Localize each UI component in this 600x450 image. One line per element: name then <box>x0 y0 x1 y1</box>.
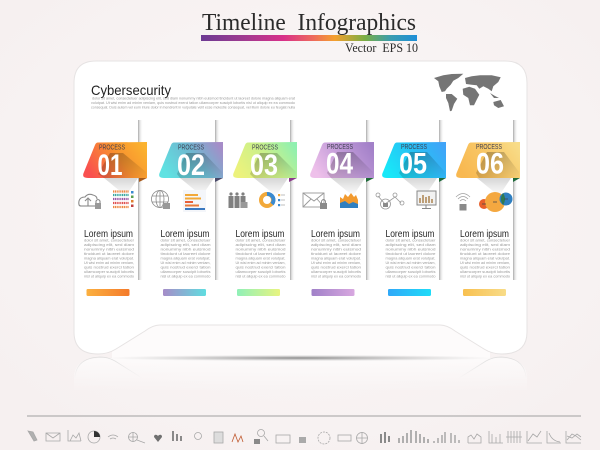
icon: venn circles <box>479 192 512 212</box>
heading: Cybersecurity: Cybersecurity <box>91 82 171 98</box>
color bar 5 <box>388 289 431 296</box>
color bar 6 <box>463 289 506 296</box>
icon: colored chart <box>232 434 243 442</box>
icon: falling bars <box>416 431 428 443</box>
text block 2: nonummy nibh euismod <box>160 248 211 252</box>
text block 2: magna aliquam erat volutpat. <box>160 256 211 260</box>
text block 2: ullamcorper suscipit lobortis <box>160 270 211 274</box>
text block 4: nisl ut aliquip ex ea commodo <box>311 274 361 278</box>
number 3: 03 <box>250 149 278 182</box>
icon: magnify bulb <box>194 432 202 440</box>
icon: wifi small <box>108 435 118 439</box>
text block 6: tincidunt ut laoreet dolore <box>460 252 510 256</box>
text block 3: nonummy nibh euismod <box>236 248 286 252</box>
text block 5: adipiscing elit, sed diam <box>386 243 436 247</box>
fold line 6 <box>513 120 518 280</box>
text block 4: ullamcorper suscipit lobortis <box>311 270 361 274</box>
icon: network lock <box>376 193 404 209</box>
subtitle: Vector EPS 10 <box>345 41 418 55</box>
icon: cloud lock small <box>338 435 351 441</box>
column 6 <box>456 120 520 296</box>
icon: small rising bars <box>434 432 445 443</box>
tab 6 <box>456 142 520 178</box>
text block 2: nisl ut aliquip ex ea commodo <box>160 274 211 278</box>
color bar 3 <box>237 289 280 296</box>
number 4: 04 <box>326 148 353 180</box>
icon: people rows chart <box>113 191 134 207</box>
icon: people lock <box>228 192 248 208</box>
notch fill <box>112 325 490 358</box>
icon: house bars <box>468 434 481 443</box>
icon: donut chart <box>261 194 285 206</box>
icon: curve chart <box>547 431 561 443</box>
intro text: volutpat. Ut wisi enim ad minim veniam, quis nostrud exerci tation ullamcorper suscipit lobortis nisl ut aliquip ex ea commodo <box>91 101 295 105</box>
text block 3: dolor sit amet, consectetuer <box>236 238 287 242</box>
column 3 <box>228 120 297 296</box>
intro text: consequat. Duis autem vel eum iriure dolor in hendrerit in vulputate velit esse molestie consequat, vel illum dolore eu feugiat nulla <box>91 106 295 110</box>
text block 6: Ut wisi enim ad minim veniam, <box>460 261 510 265</box>
tab corner 5 <box>439 178 446 182</box>
icon: bar chart <box>183 190 206 212</box>
icon: monitor <box>276 435 290 443</box>
process label 1: PROCESS <box>99 142 125 152</box>
tab shadow 5 <box>403 178 437 196</box>
tab corner 6 <box>513 178 520 182</box>
icon: monitor chart <box>417 191 436 208</box>
icon: bar chart outline <box>489 431 503 443</box>
icon: gear lock <box>318 432 330 444</box>
icon: heart <box>154 435 162 442</box>
text block 1 <box>84 228 135 278</box>
tab 1 <box>83 142 147 178</box>
icon: bar chart <box>173 431 181 441</box>
column 4 <box>303 120 374 296</box>
color bar 4 <box>312 289 354 296</box>
icon: area lines chart <box>566 431 581 443</box>
icon: area chart small <box>68 430 81 441</box>
number shadow 6 <box>476 152 519 178</box>
text block 4: tincidunt ut laoreet dolore <box>311 252 361 256</box>
text block 4: nonummy nibh euismod <box>311 248 361 252</box>
tab corner 1 <box>139 178 147 182</box>
panel: main board <box>74 61 527 354</box>
column 2 <box>152 120 223 296</box>
icon: envelope <box>46 433 60 441</box>
process label 4: PROCESS <box>327 142 353 151</box>
fold line 1 <box>138 120 143 280</box>
process label 2: PROCESS <box>178 142 204 152</box>
intro text <box>91 96 295 110</box>
number 1: 01 <box>98 149 122 182</box>
text block 2: Lorem ipsum <box>160 228 210 240</box>
text block 5 <box>386 228 437 278</box>
text block 1: tincidunt ut laoreet dolore <box>84 252 134 256</box>
tab 2 <box>159 142 223 178</box>
icon: area chart <box>340 193 358 208</box>
icon: padlock <box>299 437 306 443</box>
text block 2: Ut wisi enim ad minim veniam, <box>160 261 211 265</box>
text block 2: tincidunt ut laoreet dolore <box>160 252 211 256</box>
process label 3: PROCESS <box>252 142 278 152</box>
tab shadow 1 <box>104 178 138 196</box>
text block 2: dolor sit amet, consectetuer <box>160 238 212 242</box>
icon: globe lock <box>152 190 170 209</box>
reflected corner lines <box>75 357 526 378</box>
tab 5 <box>382 142 446 178</box>
text block 5: Lorem ipsum <box>386 228 435 240</box>
fold line 2 <box>215 120 220 280</box>
icon: wifi lock <box>456 194 470 210</box>
icon: pie chart <box>88 431 100 443</box>
text block 2: adipiscing elit, sed diam <box>160 243 211 247</box>
color bar 1 <box>86 289 130 296</box>
color bar 2 <box>163 289 206 296</box>
text block 6 <box>460 228 511 278</box>
number shadow 2 <box>177 153 222 178</box>
text block 5: nisl ut aliquip ex ea commodo <box>386 274 436 278</box>
tab corner 2 <box>215 178 223 182</box>
title: Timeline Infographics <box>202 9 416 36</box>
process label 5: PROCESS <box>401 142 427 151</box>
process label 6: PROCESS <box>476 142 502 151</box>
text block 5: nonummy nibh euismod <box>386 248 436 252</box>
icon: cloud lock <box>79 194 101 209</box>
text block 4: Lorem ipsum <box>311 228 360 240</box>
icon: world map <box>434 74 504 111</box>
icon: globe magnifier <box>128 432 145 443</box>
text block 1: nisl ut aliquip ex ea commodo <box>84 274 134 278</box>
icon: line chart up <box>527 431 542 443</box>
tab shadow 4 <box>331 178 365 196</box>
text block 6: nonummy nibh euismod <box>460 248 510 252</box>
tab shadow 2 <box>180 178 214 196</box>
text block 1: Lorem ipsum <box>84 228 133 240</box>
tab shadow 6 <box>477 178 511 196</box>
text block 1: ullamcorper suscipit lobortis <box>84 270 134 274</box>
text block 6: nisl ut aliquip ex ea commodo <box>460 274 510 278</box>
text block 5: quis nostrud exerci tation <box>386 266 436 270</box>
text block 3: Lorem ipsum <box>236 228 285 240</box>
text block 5: dolor sit amet, consectetuer <box>386 238 437 242</box>
tab 3 <box>233 142 297 178</box>
fold line 4 <box>366 120 371 280</box>
rainbow title bar <box>201 35 417 41</box>
text block 3: adipiscing elit, sed diam <box>236 243 286 247</box>
number shadow 4 <box>327 152 373 178</box>
number shadow 5 <box>399 152 445 178</box>
text block 1: adipiscing elit, sed diam <box>84 243 134 247</box>
text block 6: ullamcorper suscipit lobortis <box>460 270 510 274</box>
text block 5: magna aliquam erat volutpat. <box>386 256 436 260</box>
text block 4: quis nostrud exerci tation <box>311 266 361 270</box>
text block 6: quis nostrud exerci tation <box>460 266 510 270</box>
text block 3: quis nostrud exerci tation <box>236 266 286 270</box>
text block 3: Ut wisi enim ad minim veniam, <box>236 261 286 265</box>
icon: rising bars <box>399 430 411 443</box>
tab 4 <box>310 142 374 178</box>
number 2: 02 <box>177 149 205 182</box>
text block 4 <box>311 228 362 278</box>
tab corner 3 <box>289 178 297 182</box>
footer icon row <box>28 430 581 444</box>
text block 5: ullamcorper suscipit lobortis <box>386 270 436 274</box>
icon: vertical sliders <box>506 431 522 443</box>
tab corner 4 <box>366 178 374 182</box>
footer rule <box>27 416 581 417</box>
text block 6: Lorem ipsum <box>460 228 509 240</box>
text block 1: Ut wisi enim ad minim veniam, <box>84 261 134 265</box>
text block 3: nisl ut aliquip ex ea commodo <box>236 274 286 278</box>
text block 2 <box>160 228 212 278</box>
icon: envelope lock <box>303 193 327 209</box>
ground shadow <box>105 355 495 361</box>
tab shadow 3 <box>254 178 288 196</box>
text block 6: adipiscing elit, sed diam <box>460 243 510 247</box>
text block 3 <box>236 228 287 278</box>
fold line 5 <box>439 120 444 280</box>
icon: people <box>381 432 389 443</box>
text block 6: magna aliquam erat volutpat. <box>460 256 510 260</box>
icon: document <box>214 432 223 443</box>
text block 5: tincidunt ut laoreet dolore <box>386 252 436 256</box>
icon: small falling bars <box>451 433 459 443</box>
intro text: dolor sit amet, consectetuer adipiscing elit, sed diam nonummy nibh euismod tincidunt ut laoreet dolore magna aliquam erat <box>92 96 295 100</box>
icon: globe <box>356 432 368 444</box>
text block 2: quis nostrud exerci tation <box>160 266 211 270</box>
reflection of panel <box>74 358 527 392</box>
text block 1: nonummy nibh euismod <box>84 248 134 252</box>
number shadow 1 <box>98 153 146 178</box>
text block 1: quis nostrud exerci tation <box>84 266 134 270</box>
text block 3: magna aliquam erat volutpat. <box>236 256 286 260</box>
text block 4: dolor sit amet, consectetuer <box>311 238 362 242</box>
text block 4: adipiscing elit, sed diam <box>311 243 361 247</box>
text block 1: magna aliquam erat volutpat. <box>84 256 134 260</box>
number 5: 05 <box>399 148 427 180</box>
text block 3: tincidunt ut laoreet dolore <box>236 252 286 256</box>
number shadow 3 <box>250 153 296 178</box>
text block 1: dolor sit amet, consectetuer <box>84 238 135 242</box>
icon: key lock search <box>254 430 268 444</box>
text block 4: Ut wisi enim ad minim veniam, <box>311 261 361 265</box>
text block 5: Ut wisi enim ad minim veniam, <box>386 261 436 265</box>
text block 6: dolor sit amet, consectetuer <box>460 238 511 242</box>
number 6: 06 <box>476 148 504 180</box>
column 5 <box>376 120 446 296</box>
text block 4: magna aliquam erat volutpat. <box>311 256 361 260</box>
text block 3: ullamcorper suscipit lobortis <box>236 270 286 274</box>
fold line 3 <box>290 120 295 280</box>
icon: hand pointer <box>28 431 37 441</box>
column 1 <box>79 120 147 296</box>
